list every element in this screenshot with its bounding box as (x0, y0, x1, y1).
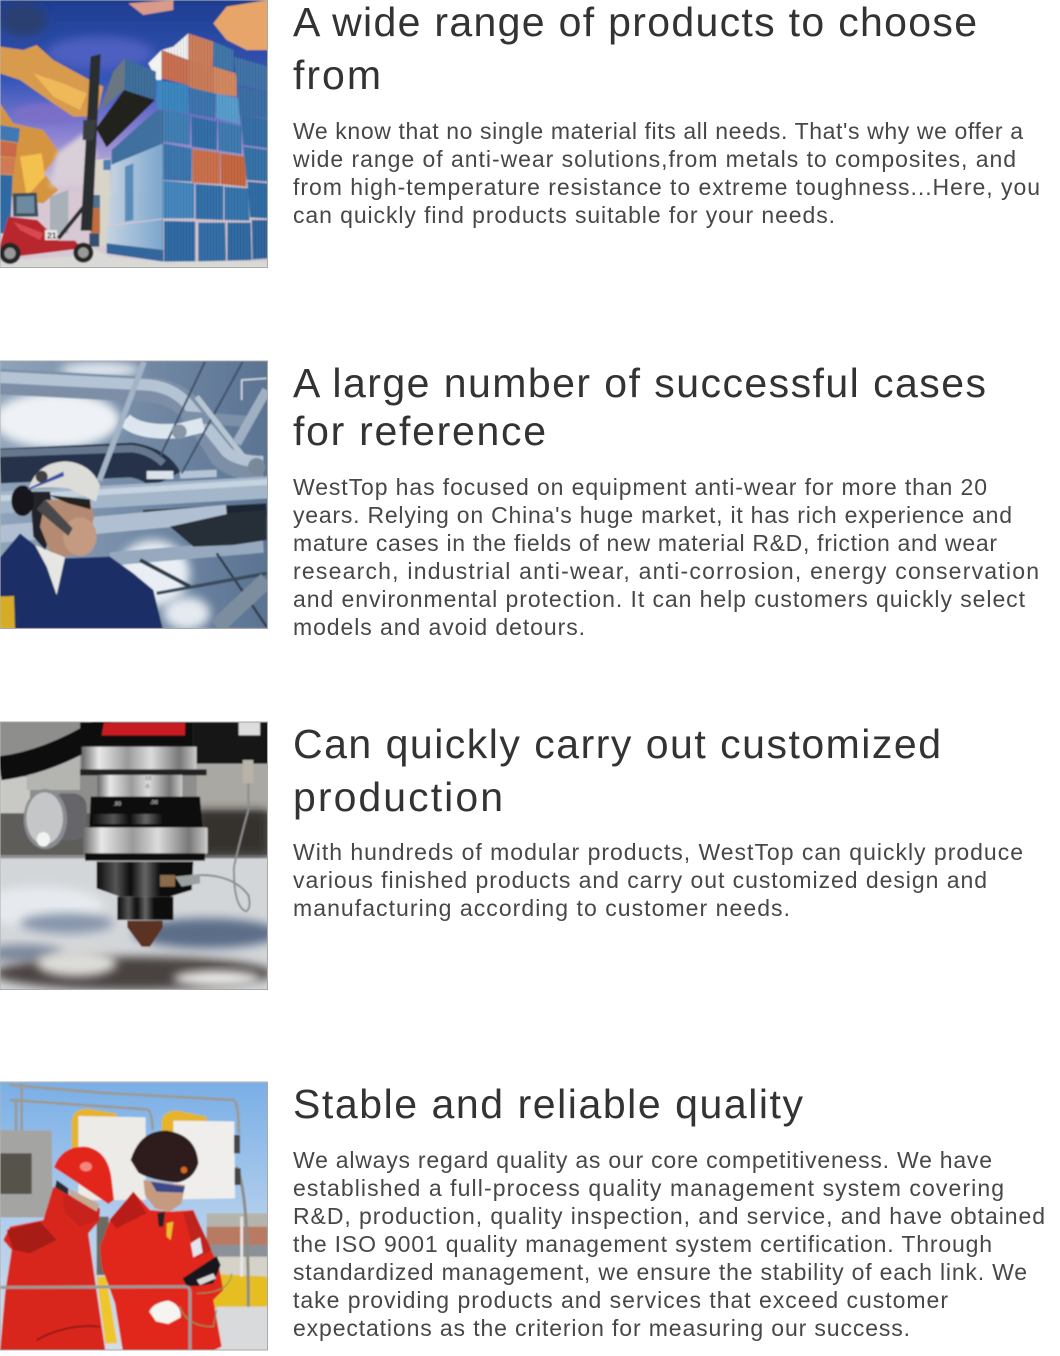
heading: Stable and reliable quality (293, 1081, 804, 1127)
photo: container yard with forklift (0, 0, 268, 267)
body text: and environmental protection. It can help customers quickly select (293, 586, 1026, 612)
body text: take providing products and services that exceed customer (293, 1287, 948, 1313)
heading: production (293, 774, 503, 820)
body text: the ISO 9001 quality management system certification. Through (293, 1231, 992, 1257)
heading (293, 721, 941, 820)
body text: With hundreds of modular products, WestTop can quickly produce (293, 839, 1023, 865)
signal cable (160, 760, 253, 911)
scaffold pipes (9, 1083, 248, 1307)
worker (0, 461, 163, 629)
body text: models and avoid detours. (293, 614, 585, 640)
body text: various finished products and carry out customized design and (293, 867, 987, 893)
body text: WestTop has focused on equipment anti-wear for more than 20 (293, 474, 987, 500)
photo: laser cutting head (0, 720, 280, 990)
white cabinets (78, 1116, 241, 1200)
panel: customized production (0, 720, 1023, 990)
photo: two workers in red coveralls (0, 1080, 268, 1351)
body text (292, 118, 1040, 228)
body text: We know that no single material fits all needs. That's why we offer a (293, 118, 1023, 144)
panel: wide range of products (0, 0, 1040, 268)
red forklift: 21 (47, 231, 57, 241)
stacked shipping containers (107, 33, 268, 267)
heading: from (293, 52, 381, 98)
left container stack (0, 125, 20, 233)
lifted container (96, 58, 156, 147)
panel: successful cases (0, 360, 1039, 640)
body text: We always regard quality as our core competitiveness. We have (293, 1147, 992, 1173)
white glove (149, 1301, 181, 1324)
corrugated hose (0, 723, 112, 768)
body text: wide range of anti-wear solutions,from metals to composites, and (292, 146, 1016, 172)
heading (293, 360, 986, 454)
cutting head rings: .90 (113, 801, 121, 807)
grey cabinet (0, 1130, 53, 1217)
body text: established a full-process quality management system covering (293, 1175, 1004, 1201)
ground (0, 248, 268, 267)
cutting head rings: -5 (145, 784, 149, 790)
heading: A wide range of products to choose (293, 0, 977, 45)
body text: years. Relying on China's huge market, it has rich experience and (293, 502, 1012, 528)
body text: expectations as the criterion for measuring our success. (293, 1315, 910, 1341)
forklift mast (58, 54, 101, 238)
worker in red hard hat (0, 1147, 114, 1351)
body text: manufacturing according to customer needs. (293, 895, 790, 921)
pipework (0, 362, 268, 627)
pressure gauge (24, 789, 87, 849)
heading: A large number of successful cases (293, 360, 986, 406)
cutting head rings: -10 (143, 776, 151, 782)
photo: worker on phone among pipes (0, 360, 268, 630)
body text: standardized management, we ensure the stability of each link. We (293, 1259, 1027, 1285)
body text (293, 474, 1039, 640)
body text: from high-temperature resistance to extreme toughness...Here, you (293, 174, 1040, 200)
panel: stable quality (0, 1080, 1045, 1351)
body text: mature cases in the fields of new material R&D, friction and wear (293, 530, 997, 556)
body text (293, 1147, 1045, 1341)
heading: for reference (293, 408, 546, 454)
red forklift (0, 193, 93, 264)
black upper housing (193, 722, 268, 764)
cutting head rings (80, 747, 208, 947)
cutting head rings: .00 (150, 800, 158, 806)
body text (293, 839, 1023, 921)
heading: Can quickly carry out customized (293, 721, 941, 767)
body text: can quickly find products suitable for your needs. (293, 202, 835, 228)
worker in fur hat (100, 1131, 232, 1351)
body text: R&D, production, quality inspection, and service, and have obtained (293, 1203, 1045, 1229)
guard rail (0, 1287, 190, 1351)
heading (293, 0, 977, 98)
yellow tanks (72, 1109, 207, 1148)
body text: research, industrial anti-wear, anti-corrosion, energy conservation (293, 558, 1039, 584)
